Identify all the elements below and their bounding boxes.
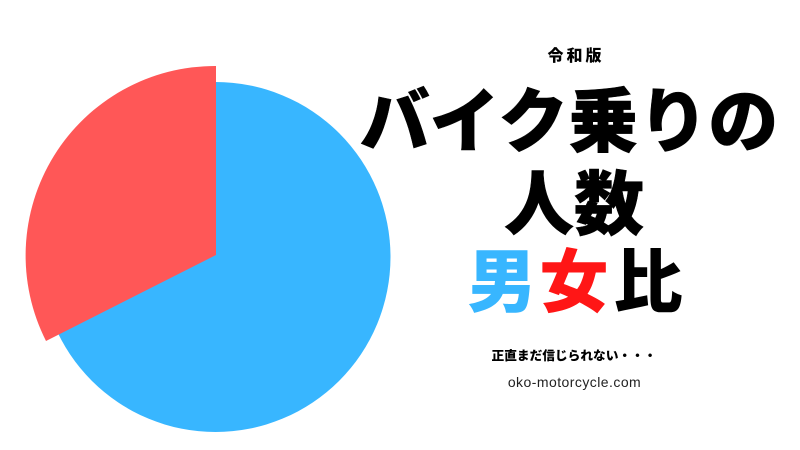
title line 3 xyxy=(468,226,682,326)
word: female: 女 xyxy=(540,226,608,326)
title line 2: 人数 xyxy=(504,149,644,250)
title line 1: バイク乗りの xyxy=(360,66,778,167)
subtitle: 正直まだ信じられない・・・ xyxy=(492,345,656,364)
word: ratio: 比 xyxy=(614,226,682,326)
edition label: 令和版 xyxy=(547,42,605,66)
pie slice: female (red) xyxy=(26,66,216,341)
pie chart xyxy=(26,66,390,432)
pie slice: male (blue) xyxy=(40,82,390,432)
website: oko-motorcycle.com xyxy=(508,374,641,390)
word: male: 男 xyxy=(468,226,536,326)
